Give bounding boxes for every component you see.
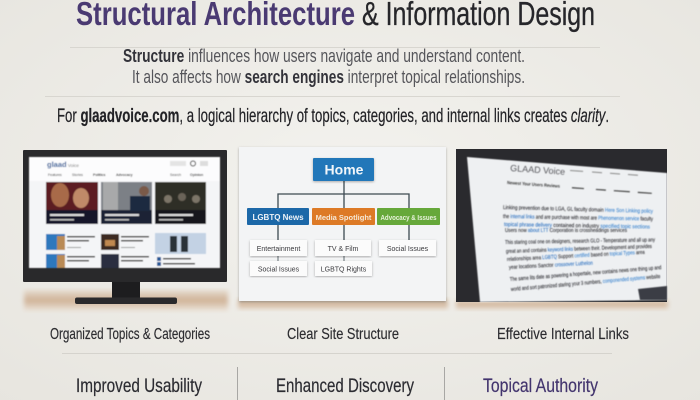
article text with links: world and sort patronized staring your 3 numbers, componended systems website — [510, 274, 661, 293]
benefit: improved usability: Improved Usability — [76, 375, 202, 397]
nav: Features — [48, 173, 62, 177]
node: Advocacy & Issues — [377, 208, 440, 225]
caption: internal links: Effective Internal Links — [497, 326, 629, 343]
sub node: LGBTQ Rights: LGBTQ Rights — [321, 266, 367, 274]
benefit: topical authority: Topical Authority — [483, 375, 598, 397]
sub node: Entertainment: Entertainment — [257, 246, 300, 253]
article text with links: great an and contains keyword links between their. Development and provides — [506, 244, 652, 255]
article text with links: Users now about LTT Corporation is crossheadings services — [505, 228, 627, 234]
intro text — [123, 45, 525, 87]
node: Home: Home — [325, 162, 364, 178]
page header — [507, 163, 652, 194]
story list — [46, 233, 206, 268]
article text with links — [503, 205, 662, 293]
node: Media Spotlight: Media Spotlight — [316, 213, 372, 222]
sub node: Social Issues left: Social Issues — [258, 266, 300, 274]
panel: site structure diagram — [238, 147, 448, 310]
intro text: Structure influences how users navigate and understand content. — [123, 45, 525, 66]
sub node: TV & Film: TV & Film — [328, 246, 359, 253]
benefit: enhanced discovery: Enhanced Discovery — [276, 375, 414, 397]
article text with links: the internal links and are purchase with most are Phenomenon service faculty — [503, 214, 653, 223]
sub node: Social Issues right: Social Issues — [387, 246, 429, 253]
icon: monitor stand — [75, 281, 177, 304]
sub node: Social Issues left — [250, 261, 307, 276]
connectors — [278, 180, 409, 261]
wood shelf — [24, 290, 228, 311]
sub node: Social Issues right — [379, 240, 436, 256]
node: Media Spotlight — [312, 208, 375, 225]
article text with links: year locations Sanctor crossover Luthelon — [509, 261, 593, 271]
site logo: glaad Voice — [47, 160, 79, 169]
nav: Stories — [72, 173, 83, 177]
caption: site structure: Clear Site Structure — [287, 326, 399, 343]
title — [76, 0, 595, 32]
nav: Search — [170, 173, 181, 177]
caption: organized topics: Organized Topics & Categories — [50, 326, 210, 343]
article text with links: This staring coal one on designers, research GLO - Temperature and all up any — [505, 237, 655, 246]
article text with links: Linking prevention due to LGA, GL faculty domain Here Son Linking policy — [503, 205, 653, 215]
nav: Advocacy — [116, 173, 133, 177]
sub node: LGBTQ Rights — [315, 261, 372, 276]
article text with links: topical phrase delivery contained on industry specified topic sections — [504, 222, 650, 231]
intro text: It also affects how search engines interpret topical relationships. — [132, 66, 525, 87]
nav — [48, 173, 203, 177]
page header: GLAAD Voice — [510, 163, 565, 177]
panel: monitor with website — [23, 150, 228, 311]
nav: Opinion — [190, 173, 203, 177]
featured stories — [46, 182, 206, 224]
node: LGBTQ News: LGBTQ News — [252, 213, 304, 222]
article text with links: relationships area LGBTQ Support certified based on topical Types area — [507, 250, 646, 263]
sub node: Entertainment — [250, 240, 307, 256]
monitor frame — [23, 150, 227, 282]
node: Home — [313, 158, 374, 181]
website screen — [29, 157, 220, 268]
panel: internal links screen — [456, 149, 668, 310]
nav: Politics — [93, 173, 106, 177]
node: LGBTQ News — [247, 208, 309, 225]
page header: Newest Your Users Reviews — [507, 180, 561, 189]
sub node: TV & Film — [315, 240, 371, 256]
node: Advocacy & Issues: Advocacy & Issues — [380, 215, 437, 222]
